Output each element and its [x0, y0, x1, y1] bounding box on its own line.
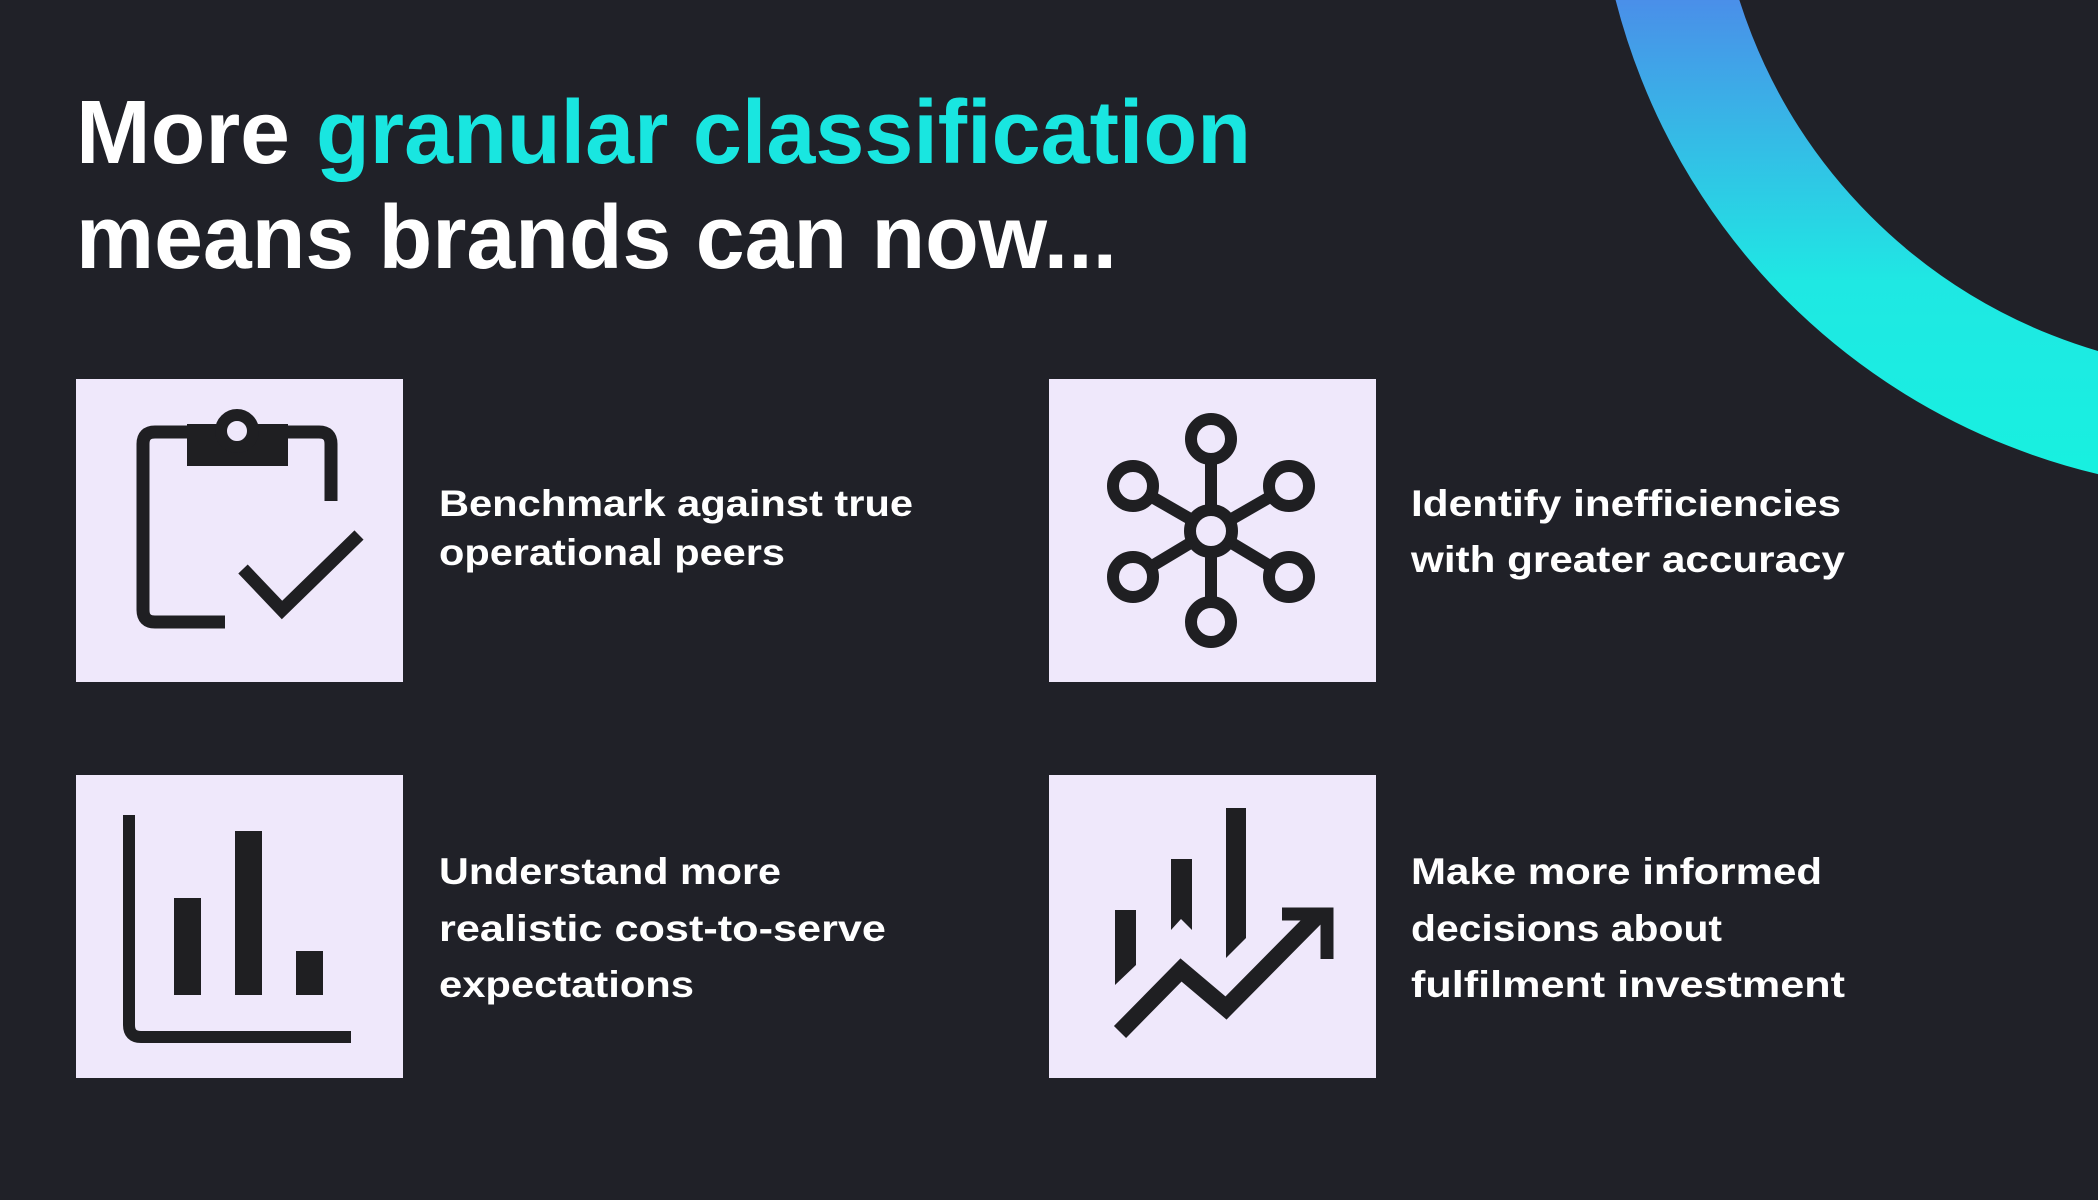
title: More	[76, 83, 290, 183]
panel: identify	[1049, 379, 1845, 682]
title: granular classification	[316, 83, 1251, 183]
text: decisions: fulfilment investment	[1411, 964, 1845, 1005]
text: understand: realistic cost-to-serve	[439, 908, 886, 949]
title: means brands can now...	[76, 188, 1117, 288]
text: understand: expectations	[439, 964, 694, 1005]
text: identify: Identify inefficiencies	[1411, 483, 1841, 524]
text: identify: with greater accuracy	[1410, 539, 1845, 580]
text: benchmark	[439, 483, 913, 573]
panel: decisions	[1049, 775, 1845, 1078]
text: decisions	[1411, 851, 1845, 1005]
decorative arc	[1655, 0, 2098, 432]
text: decisions: decisions about	[1411, 908, 1722, 949]
text: understand: Understand more	[439, 851, 781, 892]
title	[76, 83, 1251, 288]
text: decisions: Make more informed	[1411, 851, 1822, 892]
text: understand	[439, 851, 886, 1005]
icon: bar chart	[76, 775, 403, 1078]
icon: network	[1049, 379, 1376, 682]
text: benchmark: Benchmark against true	[439, 483, 913, 524]
icon: clipboard check	[76, 379, 403, 682]
panel: understand	[76, 775, 886, 1078]
icon: growth chart	[1049, 775, 1376, 1078]
panel: benchmark	[76, 379, 913, 682]
text: identify	[1410, 483, 1845, 580]
text: benchmark: operational peers	[439, 532, 785, 573]
